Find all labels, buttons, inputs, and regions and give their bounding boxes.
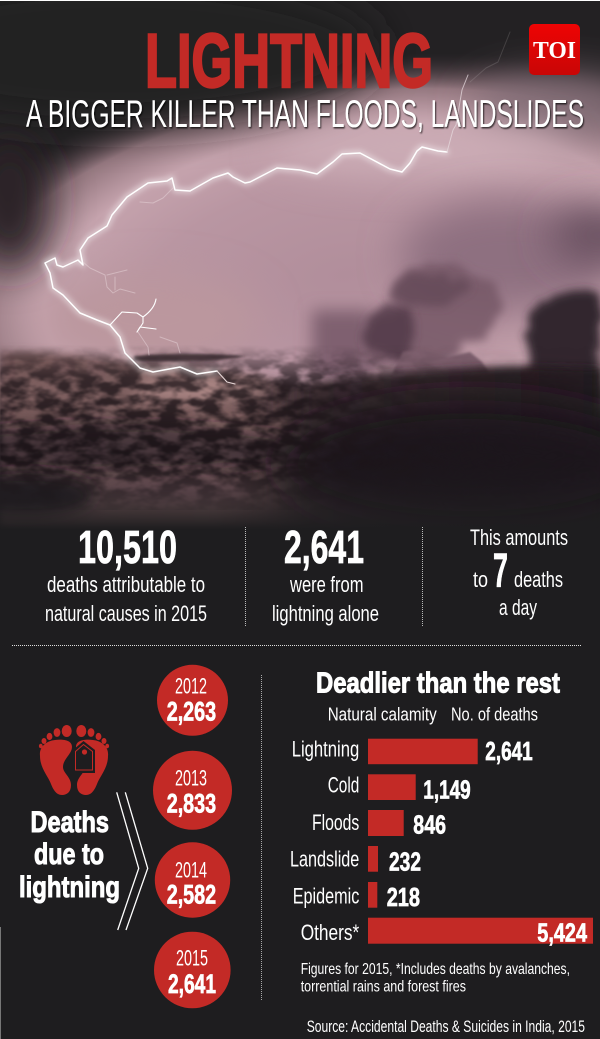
bar: lightning: 2,641 <box>485 736 533 766</box>
bar: floods: Floods <box>312 810 359 835</box>
bar: others <box>301 918 593 948</box>
bar: others: Others* <box>301 920 360 945</box>
bar: floods: 846 <box>413 809 446 839</box>
stat: deaths a day <box>470 525 568 620</box>
column headers: Natural calamity <box>328 705 437 725</box>
stat: deaths a day: a day <box>499 595 537 620</box>
circle: 2014: 2014 <box>175 857 207 882</box>
circle: 2012: 2012 <box>175 673 207 698</box>
circle: 2013: 2013 <box>175 766 207 791</box>
stat: total deaths <box>45 521 207 626</box>
stat: lightning deaths <box>272 521 379 626</box>
stat: deaths a day: deaths <box>514 567 563 592</box>
bar: epidemic: 218 <box>387 882 420 912</box>
bar: cold <box>328 773 471 804</box>
bar: cold: 1,149 <box>423 774 471 804</box>
circle: 2014 <box>155 842 230 918</box>
circle: 2015: 2015 <box>176 946 208 971</box>
circle: 2012 <box>157 665 228 736</box>
background photo: lightning storm <box>0 0 600 530</box>
dark storm clouds right <box>312 263 600 410</box>
heading: deaths due to lightning: lightning <box>19 871 120 904</box>
circle: 2013 <box>153 751 232 830</box>
bar: landslide: Landslide <box>290 847 359 872</box>
icon: feet with toe tag <box>39 725 109 795</box>
stat: total deaths: deaths attributable to <box>47 572 205 597</box>
circle: 2015: 2,641 <box>168 969 216 999</box>
lightning bolt <box>45 32 510 384</box>
column headers: No. of deaths <box>451 705 538 725</box>
circle: 2012: 2,263 <box>167 697 216 727</box>
bar: floods <box>312 809 446 839</box>
bar: lightning: Lightning <box>292 737 359 762</box>
stat: lightning deaths: 2,641 <box>284 521 364 573</box>
heading: deaths due to lightning <box>19 806 120 904</box>
stat: total deaths: natural causes in 2015 <box>45 601 207 626</box>
circle: 2015 <box>154 932 231 1008</box>
bar chart <box>290 736 593 948</box>
heading: deaths due to lightning: Deaths <box>30 806 109 839</box>
bar: epidemic: Epidemic <box>293 883 359 908</box>
circle: 2013: 2,833 <box>167 789 216 819</box>
stat: deaths a day: to <box>473 567 488 592</box>
circle: 2014: 2,582 <box>167 879 216 909</box>
stat: deaths a day: This amounts <box>470 525 568 550</box>
bar: cold: Cold <box>328 773 359 798</box>
icon: TOI logo: TOI <box>533 38 576 64</box>
cloud band <box>0 345 600 530</box>
bar: landslide: 232 <box>389 847 421 877</box>
bar: lightning <box>292 736 533 766</box>
footnote: torrential rains and forest fires <box>301 979 466 996</box>
stat: lightning deaths: lightning alone <box>272 601 379 626</box>
stat: deaths a day: 7 <box>493 545 508 598</box>
stat: lightning deaths: were from <box>289 572 364 597</box>
title: LIGHTNING <box>145 19 433 104</box>
icon: double chevron arrow <box>117 792 148 930</box>
bar: landslide <box>290 846 421 877</box>
bar: epidemic <box>293 882 420 912</box>
heading: deaths due to lightning: due to <box>34 838 104 871</box>
column headers <box>328 705 538 725</box>
footnote <box>301 961 570 996</box>
icon: TOI logo <box>529 24 580 75</box>
stat: total deaths: 10,510 <box>78 521 177 573</box>
